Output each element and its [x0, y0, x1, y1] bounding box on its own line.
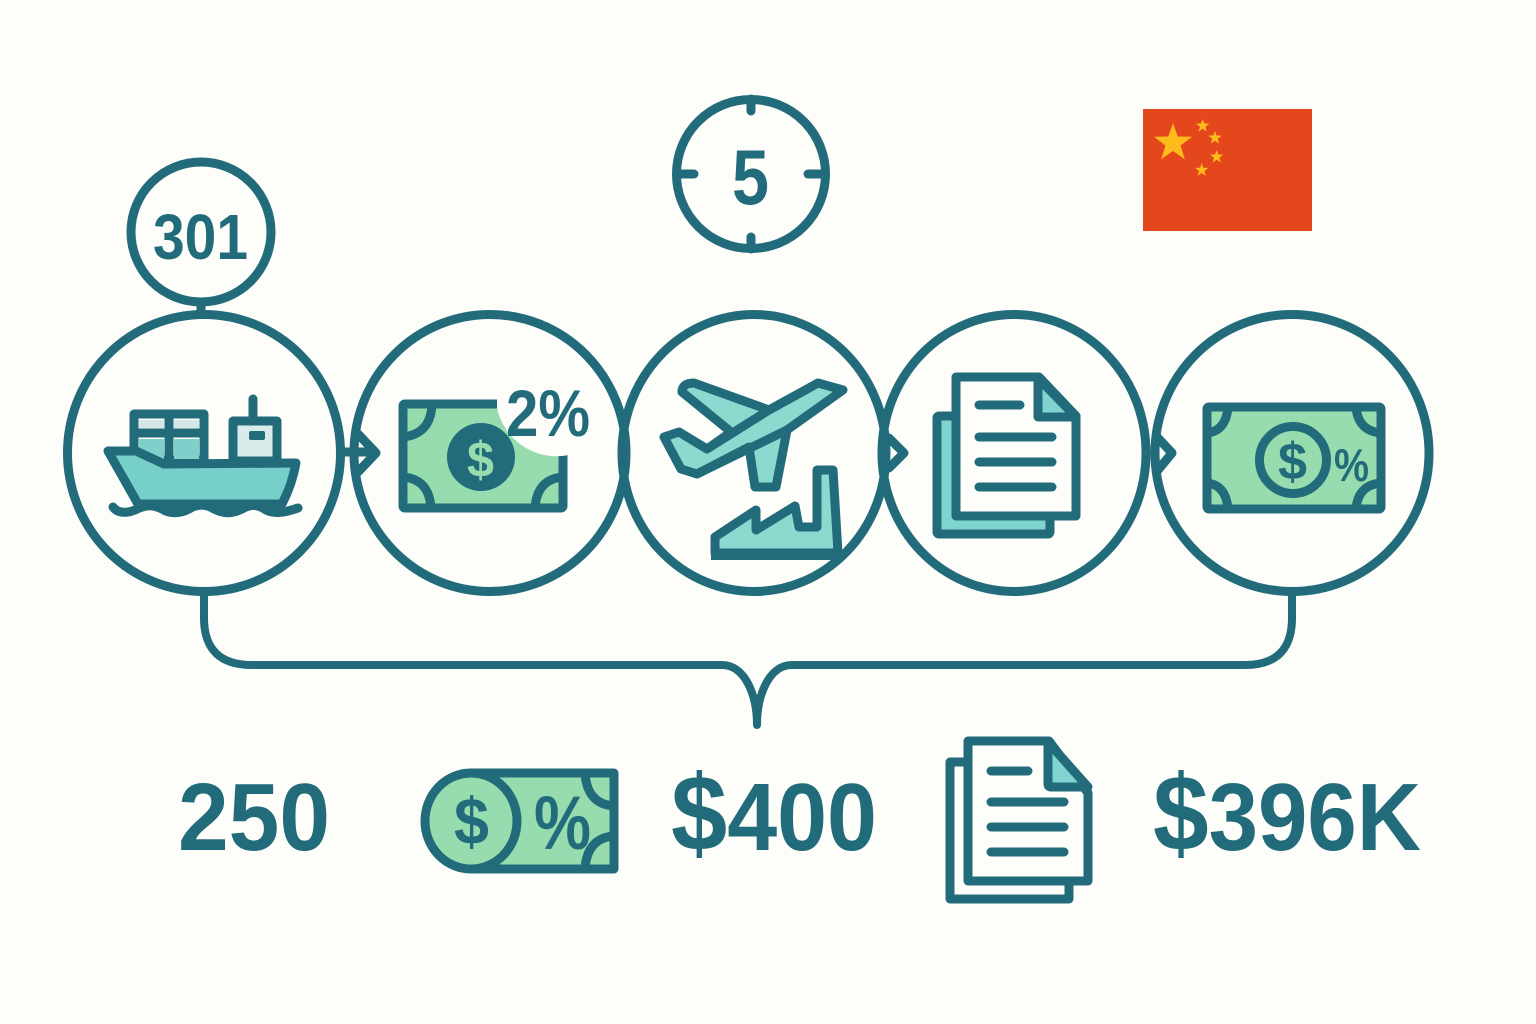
step 1: cargo ship — [68, 314, 340, 592]
stat: $396K: $396K — [1153, 752, 1421, 873]
badge: 301: 301 — [153, 201, 248, 273]
stat: 250: 250 — [178, 764, 330, 871]
clock badge: 5 — [676, 99, 826, 249]
arrow: step 3 to 4 — [889, 438, 904, 468]
step 2: banknote with 2%: 2% — [506, 376, 590, 450]
bracket connecting steps — [204, 596, 1292, 725]
step 3: airplane and factory — [622, 314, 886, 592]
clock badge: 5: 5 — [732, 133, 769, 221]
icon: banknote with coin: $ — [454, 784, 489, 858]
step 2: banknote with 2%: $ — [467, 432, 494, 488]
step 5: banknote with coin and percent: % — [1334, 439, 1369, 491]
arrow: step 4 to 5 — [1158, 438, 1172, 470]
stat: $400: $400 — [671, 752, 877, 873]
step 4: documents — [882, 314, 1146, 592]
step 5: banknote with coin and percent — [1155, 314, 1429, 592]
step 2: banknote with 2% — [354, 314, 626, 592]
icon: banknote with coin — [425, 773, 614, 869]
icon: document stack — [950, 741, 1088, 899]
arrow: step 1 to 2 — [345, 434, 376, 472]
flag of China — [1143, 109, 1312, 231]
badge: 301 — [131, 162, 271, 316]
icon: banknote with coin: % — [534, 781, 591, 866]
step 5: banknote with coin and percent: $ — [1278, 433, 1307, 491]
